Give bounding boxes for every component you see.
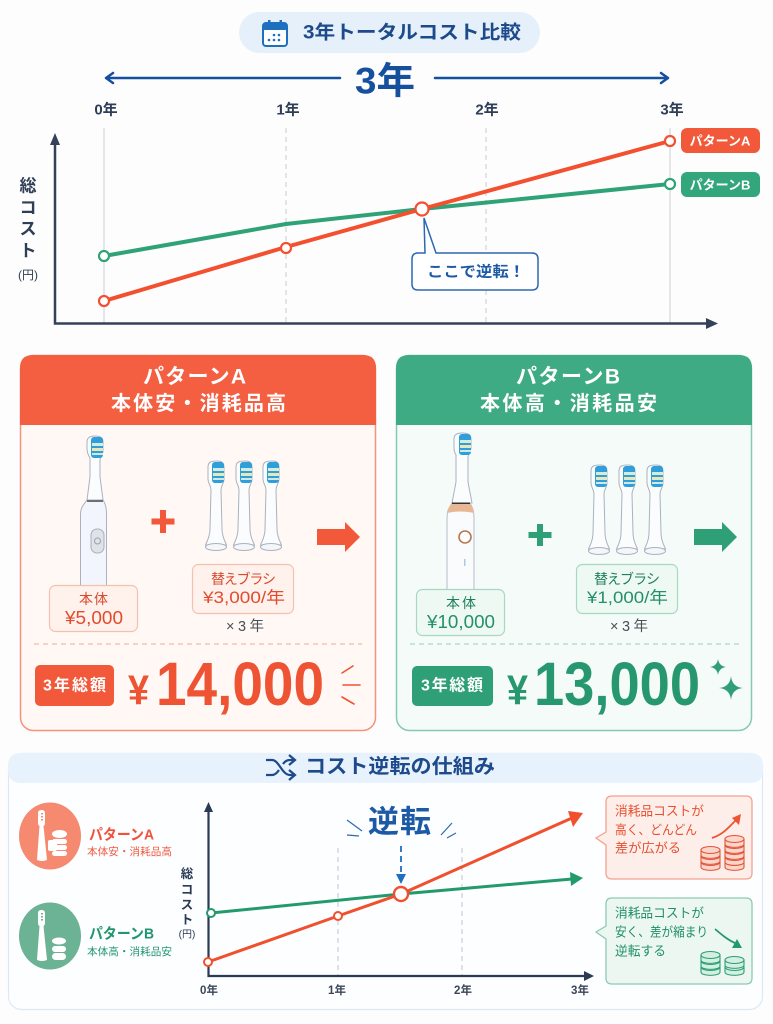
line chart: total cost <box>18 100 760 329</box>
badge: 3 year total A <box>35 665 114 706</box>
label: body price A: 本体 <box>79 591 108 607</box>
y axis label <box>18 176 38 282</box>
panel header: pattern B: パターンB <box>516 366 620 388</box>
title: 3年トータルコスト比較 <box>303 20 521 44</box>
panel header: pattern A: パターンA <box>143 366 246 388</box>
arrow <box>694 522 737 552</box>
x axis labels: 0年 <box>200 983 218 997</box>
y axis label: (円) <box>179 930 195 940</box>
callout: reversal point: ここで逆転！ <box>427 262 525 280</box>
label: brush price B: ¥1,000/年 <box>586 588 668 607</box>
label: body price A: ¥5,000 <box>64 608 123 628</box>
icon: pattern A circle <box>19 802 81 870</box>
line: pattern A <box>99 136 675 306</box>
callout: pattern B: 消耗品コストが <box>615 906 704 920</box>
total: 13,000: 13,000 <box>534 650 700 718</box>
callout: reversal point <box>412 218 538 290</box>
panel header: pattern A: 本体安・消耗品高 <box>111 392 286 415</box>
legend text: pattern B <box>87 926 172 958</box>
y axis label: 総 <box>181 866 194 881</box>
legend text: pattern A: 本体安・消耗品高 <box>87 845 172 858</box>
badge: 3 year total B <box>412 666 493 706</box>
icon: calendar <box>263 20 287 46</box>
legend text: pattern B: 本体高・消耗品安 <box>87 945 172 958</box>
legend: pattern A: パターンA <box>690 134 751 148</box>
total: 14,000: 14,000 <box>156 650 324 718</box>
text: times 3 years A: ×3年 <box>226 618 264 635</box>
panel header: pattern B: 本体高・消耗品安 <box>480 392 657 415</box>
x axis labels: 3年 <box>571 983 589 997</box>
panel: how the reversal works <box>8 753 763 1010</box>
axes <box>204 802 594 981</box>
duration arrow: 3年 <box>106 60 668 102</box>
legend: pattern B: パターンB <box>690 178 750 192</box>
total: 14,000: ¥ <box>128 666 150 714</box>
line chart: reversal mechanism <box>179 802 594 997</box>
icon: pattern B circle <box>19 902 81 970</box>
line: pattern B <box>207 872 583 917</box>
label: brush price B <box>576 564 678 614</box>
line: pattern B <box>99 179 675 261</box>
duration arrow: 3年: 3年 <box>355 60 415 102</box>
arrow: rising <box>712 814 741 838</box>
arrow <box>317 522 360 552</box>
callout: pattern A: 差が広がる <box>615 840 681 856</box>
arrow: dashed down <box>396 846 406 884</box>
y axis label: ス <box>20 220 36 238</box>
title <box>239 12 540 53</box>
label: body price B <box>416 590 504 636</box>
accent ticks <box>342 666 360 704</box>
sparkles <box>710 659 743 700</box>
label: body price B: ¥10,000 <box>426 612 495 632</box>
x axis labels: 2年 <box>454 983 472 997</box>
y axis label <box>179 866 195 940</box>
icon: toothbrush body B <box>447 433 474 590</box>
callout: pattern B: 逆転する <box>615 944 666 958</box>
icon: toothbrush body A <box>80 436 106 590</box>
plus <box>152 510 174 533</box>
panel: pattern A <box>20 355 376 730</box>
x axis labels: 2年 <box>475 100 499 118</box>
badge: 3 year total A: 3年総額 <box>43 676 106 694</box>
label: reversal: 逆転 <box>368 804 432 840</box>
y axis label: コ <box>20 198 36 218</box>
y axis label: コ <box>181 883 193 897</box>
label: brush price A <box>192 564 294 614</box>
icon: coins rising <box>701 836 744 870</box>
x axis labels: 1年 <box>276 100 300 118</box>
x axis labels <box>94 100 684 118</box>
label: brush price A: 替えブラシ <box>211 571 276 587</box>
label: reversal <box>347 804 456 840</box>
panel: pattern B <box>396 355 752 730</box>
callout: pattern A <box>596 796 752 879</box>
callout: pattern B <box>596 898 752 984</box>
legend: pattern A <box>681 128 760 153</box>
x axis labels <box>200 983 589 997</box>
axes <box>50 133 718 329</box>
icon: replacement brush heads A <box>206 461 282 550</box>
x axis labels: 3年 <box>660 100 684 118</box>
callout: pattern A: 高く、どんどん <box>615 822 697 838</box>
legend text: pattern B: パターンB <box>89 926 154 942</box>
callout: pattern A: 消耗品コストが <box>615 804 704 818</box>
text: times 3 years B: ×3年 <box>610 618 648 635</box>
x axis labels: 0年 <box>94 100 118 118</box>
panel header <box>8 753 763 783</box>
y axis label: ト <box>20 242 36 260</box>
callout: pattern B: 安く、差が縮まり <box>615 924 708 940</box>
legend text: pattern A <box>87 826 172 858</box>
label: brush price A: ¥3,000/年 <box>202 588 285 607</box>
arrow: falling <box>715 929 742 948</box>
y axis label: 総 <box>20 176 36 196</box>
total: 13,000: ¥ <box>507 666 529 714</box>
legend text: pattern A: パターンA <box>89 826 154 844</box>
line: pattern A <box>204 811 583 966</box>
label: brush price B: 替えブラシ <box>594 571 660 587</box>
x axis labels: 1年 <box>328 983 346 997</box>
icon: shuffle <box>266 755 295 780</box>
icon: coins falling <box>701 952 744 975</box>
label: body price B: 本体 <box>446 595 476 611</box>
y axis label: ト <box>181 913 193 927</box>
plus <box>528 524 552 546</box>
icon: replacement brush heads B <box>588 465 666 554</box>
legend: pattern B <box>681 172 760 197</box>
y axis label: (円) <box>18 268 38 282</box>
badge: 3 year total B: 3年総額 <box>421 676 483 694</box>
label: body price A <box>50 586 138 632</box>
panel header: pattern B <box>396 355 752 425</box>
panel header: pattern A <box>20 355 376 425</box>
panel header: コスト逆転の仕組み <box>305 755 495 778</box>
y axis label: ス <box>181 898 193 912</box>
